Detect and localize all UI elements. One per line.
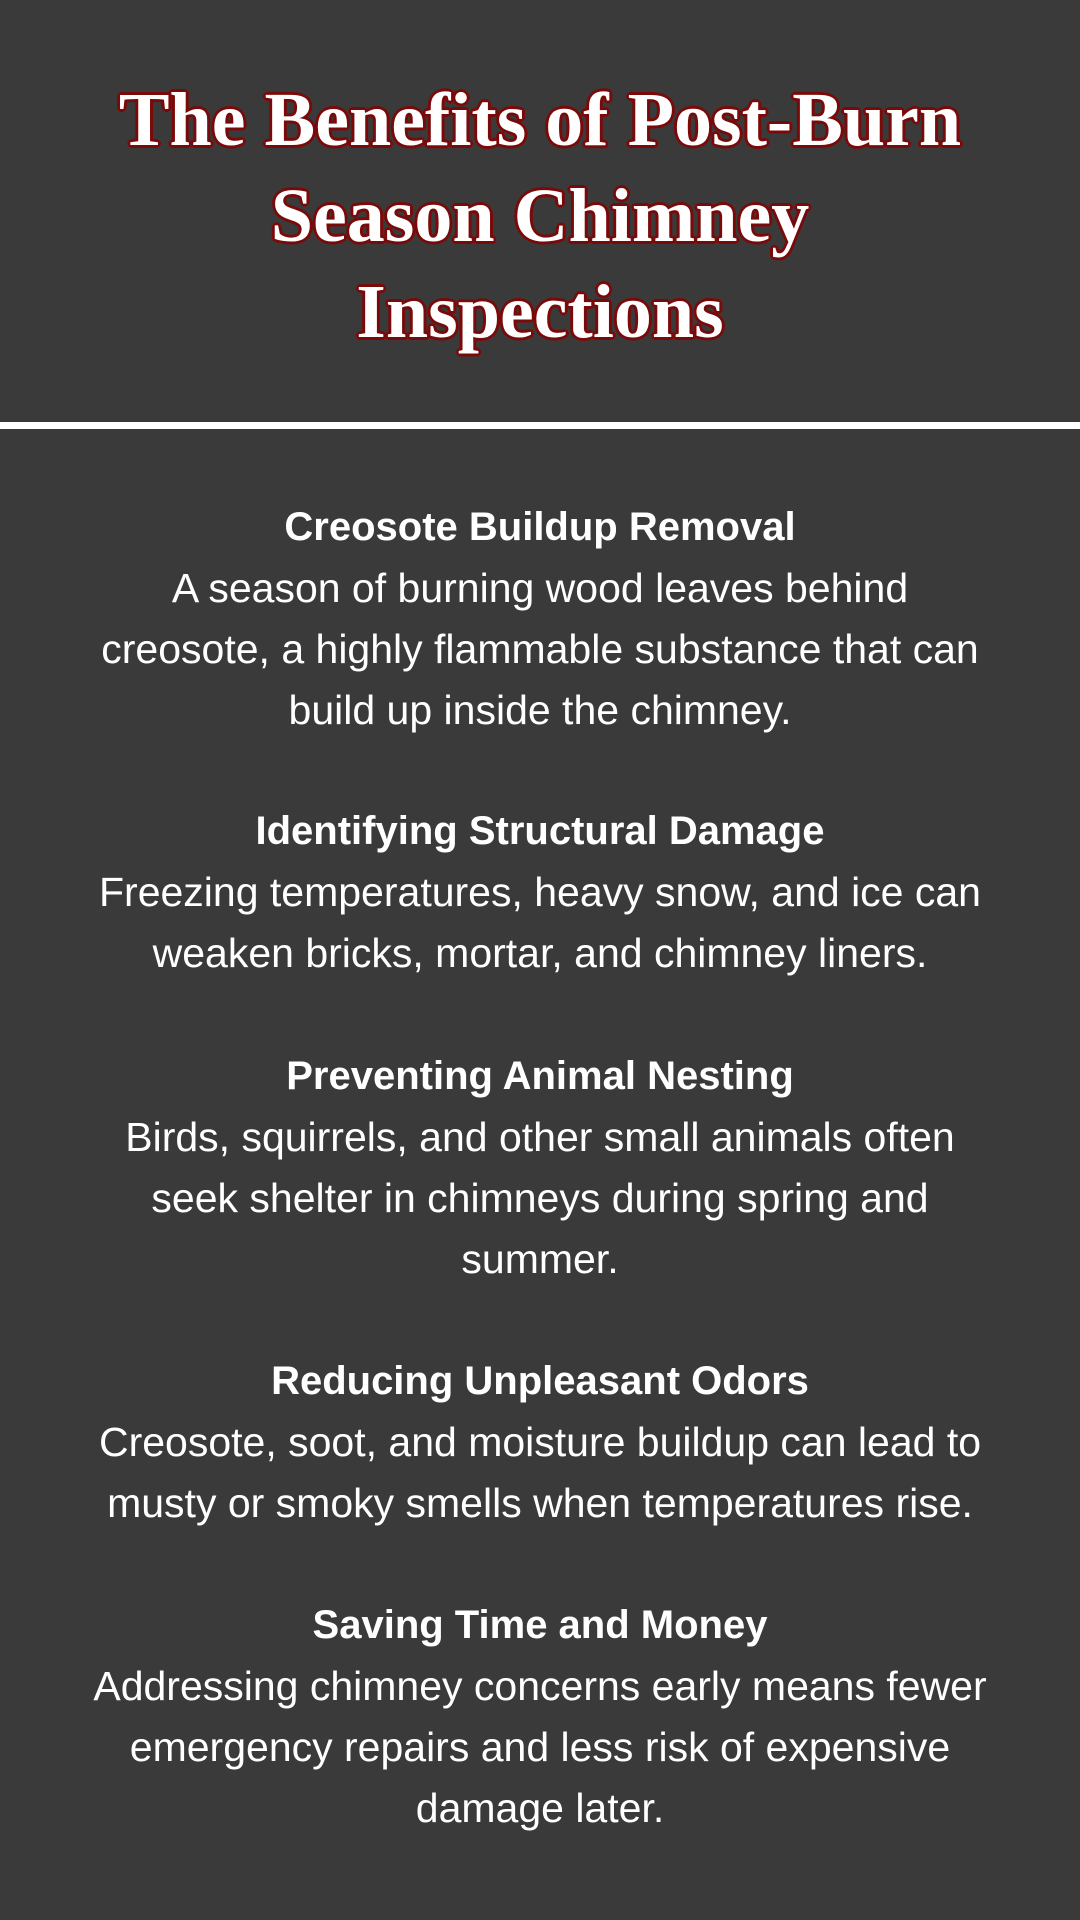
title: Season Chimney [271,174,809,258]
section: saving: Addressing chimney concerns early means fewer [93,1663,987,1709]
section: saving: Saving Time and Money [313,1603,767,1647]
section: creosote: creosote, a highly flammable substance that can [101,626,979,672]
section: creosote: build up inside the chimney. [289,687,791,733]
section: saving: damage later. [416,1785,664,1831]
section: structural damage: Freezing temperatures, heavy snow, and ice can [99,869,981,915]
title [117,78,963,356]
section: structural damage: weaken bricks, mortar, and chimney liners. [153,930,927,976]
section: odors: Creosote, soot, and moisture buildup can lead to [99,1419,981,1465]
section: creosote [101,505,979,733]
section: odors [99,1359,981,1526]
title: The Benefits of Post-Burn [119,78,961,162]
section: structural damage [99,809,981,976]
section: odors: Reducing Unpleasant Odors [271,1359,809,1403]
section: odors: musty or smoky smells when temperatures rise. [107,1480,973,1526]
section: animal nesting: Preventing Animal Nesting [286,1054,794,1098]
section: animal nesting: summer. [461,1236,619,1282]
section: creosote: Creosote Buildup Removal [284,505,796,549]
section: animal nesting: Birds, squirrels, and other small animals often [125,1114,955,1160]
section: creosote: A season of burning wood leaves behind [172,565,908,611]
section: animal nesting [125,1054,955,1282]
section: structural damage: Identifying Structural Damage [256,809,824,853]
title: Inspections [356,270,724,354]
section: saving [93,1603,987,1831]
section: animal nesting: seek shelter in chimneys during spring and [151,1175,929,1221]
section: saving: emergency repairs and less risk of expensive [130,1724,950,1770]
